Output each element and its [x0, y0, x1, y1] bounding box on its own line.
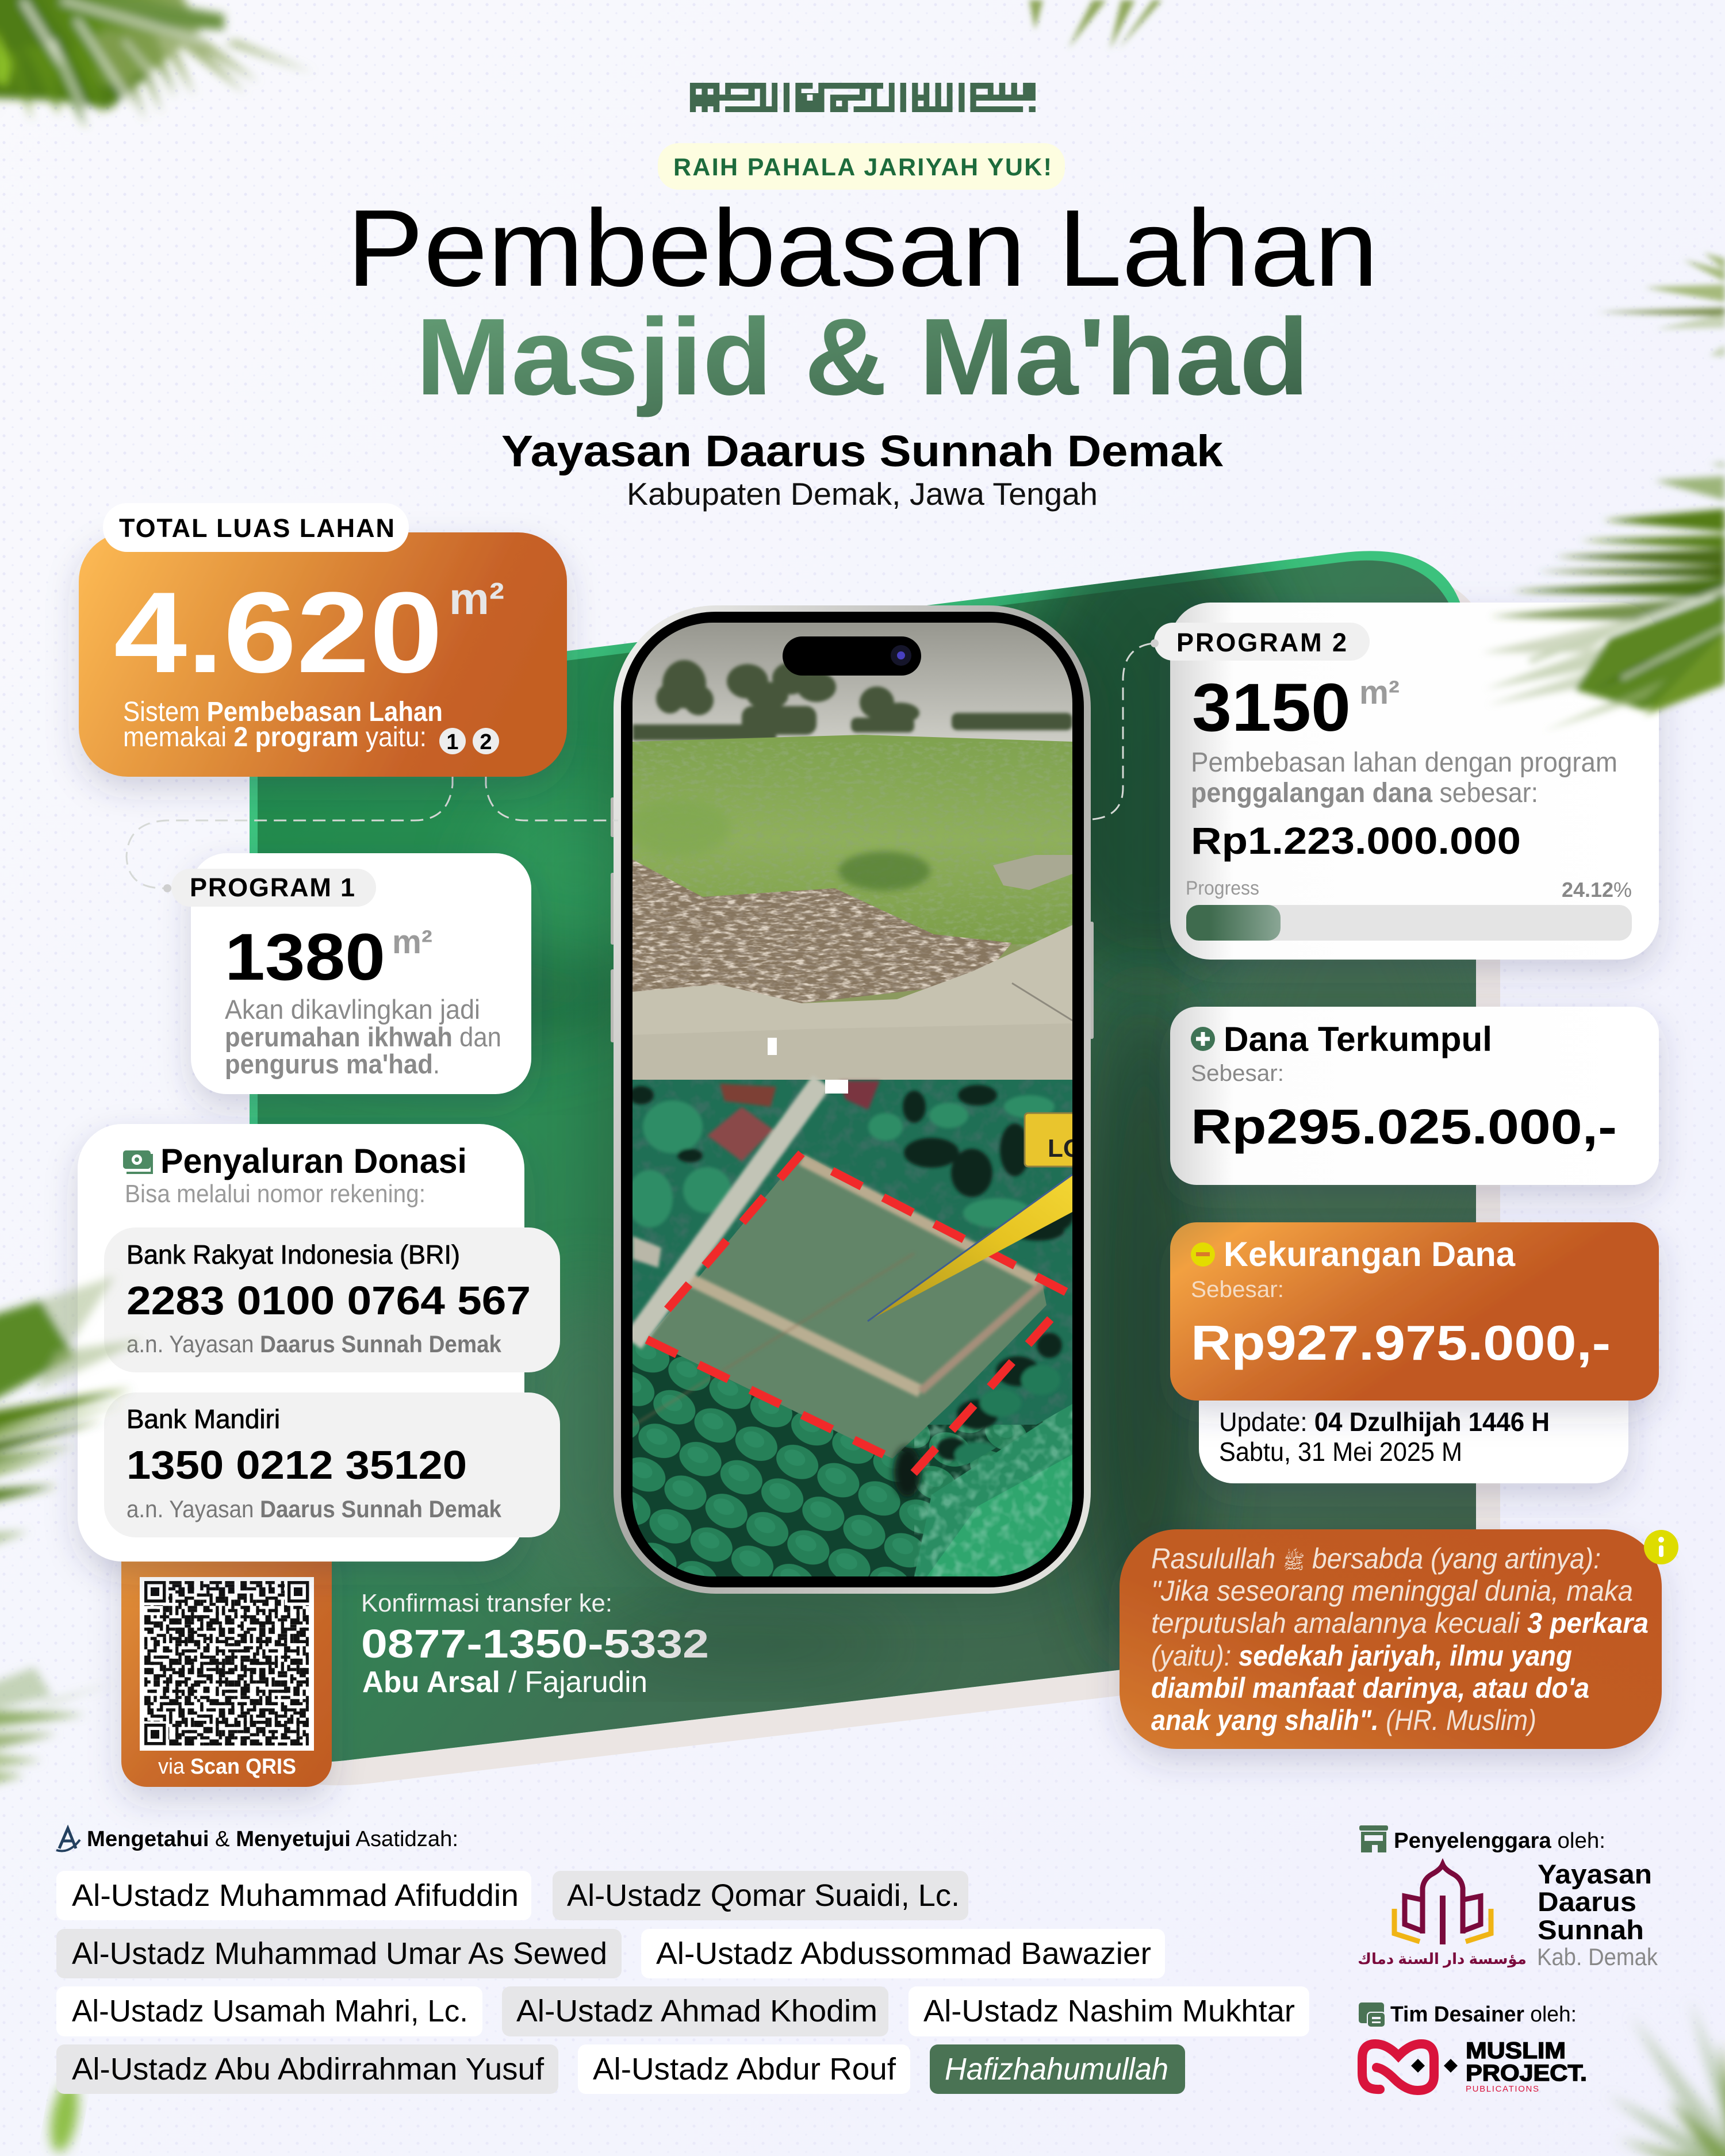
chip	[578, 2044, 910, 2094]
logo: muslim project: PROJECT.	[1466, 2061, 1587, 2086]
description: Sistem Pembebasan Lahan	[123, 697, 443, 727]
logo: muslim project: MUSLIM	[1466, 2038, 1566, 2063]
chip	[930, 2044, 1185, 2094]
chip: Al-Ustadz Nashim Mukhtar	[923, 1994, 1295, 2028]
foundation name: Kab. Demak	[1537, 1943, 1658, 1970]
palm: top center	[1029, 0, 1162, 49]
label pill: TOTAL LUAS LAHAN	[119, 513, 394, 543]
chip: Al-Ustadz Muhammad Afifuddin	[72, 1878, 519, 1913]
total value: m²	[449, 573, 504, 624]
area value: m²	[392, 923, 432, 961]
hadith callout: terputuslah amalannya kecuali 3 perkara	[1151, 1607, 1649, 1639]
description: Pembebasan lahan dengan program	[1191, 747, 1617, 778]
progress bar: 24.12%	[1562, 878, 1632, 901]
hadith callout: anak yang shalih". (HR. Muslim)	[1151, 1704, 1536, 1736]
palm: top left	[0, 0, 314, 128]
dashed connector lines	[126, 643, 1153, 888]
chip	[641, 1929, 1165, 1978]
description: memakai 2 program yaitu:	[123, 722, 427, 753]
icon: plus	[1191, 1027, 1215, 1051]
area value: 3150	[1192, 670, 1351, 746]
chip	[502, 1986, 888, 2036]
logo: muslim project: PUBLICATIONS	[1466, 2084, 1539, 2094]
red land boundary	[647, 1153, 1066, 1473]
photo: field view	[627, 623, 1072, 1081]
card: dana terkumpul	[1170, 1007, 1659, 1185]
progress bar	[1186, 877, 1632, 941]
hadith callout	[1120, 1529, 1678, 1749]
subtitle: Kabupaten Demak, Jawa Tengah	[627, 476, 1098, 512]
bank: BRI: Bank Rakyat Indonesia (BRI)	[126, 1240, 460, 1269]
progress bar: Progress	[1186, 877, 1259, 899]
card: penyaluran donasi	[78, 1124, 560, 1562]
location pin	[868, 1113, 1094, 1321]
label pill	[1151, 623, 1370, 661]
tagline pill: RAIH PAHALA JARIYAH YUK!	[673, 154, 1052, 181]
chip: Al-Ustadz Ahmad Khodim	[516, 1994, 877, 2028]
hadith callout: Rasulullah ﷺ bersabda (yang artinya):	[1151, 1543, 1601, 1575]
transfer confirmation: 0877-1350-5332	[361, 1621, 709, 1666]
card: program 2	[1151, 603, 1659, 960]
chip	[553, 1871, 968, 1920]
bank: BRI	[104, 1227, 560, 1372]
logo: muslim project	[1362, 2038, 1587, 2094]
bank: Mandiri: Bank Mandiri	[126, 1404, 280, 1434]
card: update date	[1199, 1368, 1628, 1483]
chip	[56, 1871, 531, 1920]
tagline pill	[658, 143, 1065, 190]
card: update date: Sabtu, 31 Mei 2025 M	[1219, 1437, 1462, 1467]
card: kekurangan dana: Rp927.975.000,-	[1191, 1316, 1611, 1371]
palm: bottom left spot	[46, 2080, 83, 2154]
card: program 1	[163, 853, 531, 1094]
organizer block	[1358, 1825, 1658, 1970]
palm: right upper	[1597, 253, 1725, 356]
phone	[611, 605, 1094, 1594]
card: kekurangan dana: Sebesar:	[1191, 1277, 1284, 1302]
chip: Al-Ustadz Abu Abdirrahman Yusuf	[72, 2052, 545, 2086]
chip	[56, 1929, 622, 1978]
photo: aerial view	[627, 1080, 1094, 1576]
organizer block: Penyelenggara oleh:	[1394, 1829, 1605, 1853]
transfer confirmation: Konfirmasi transfer ke:	[361, 1589, 612, 1617]
chip: Al-Ustadz Muhammad Umar As Sewed	[72, 1936, 607, 1971]
foundation name: Sunnah	[1538, 1915, 1644, 1945]
area value: 1380	[225, 920, 385, 994]
description: penggalangan dana sebesar:	[1191, 778, 1538, 808]
palm: bottom right	[1607, 2000, 1725, 2156]
chip: Hafizhahumullah	[945, 2052, 1168, 2086]
bank: Mandiri	[104, 1392, 560, 1537]
arabic name: مؤسسة دار السنة دماك	[1358, 1950, 1527, 1968]
description	[225, 994, 501, 1079]
subtitle: Yayasan Daarus Sunnah Demak	[501, 427, 1223, 476]
card: dana terkumpul: Dana Terkumpul	[1224, 1020, 1492, 1058]
transfer confirmation: Abu Arsal / Fajarudin	[362, 1666, 647, 1699]
title: Masjid & Ma'had	[416, 296, 1309, 418]
title: Pembebasan Lahan	[347, 187, 1378, 309]
description	[123, 697, 443, 753]
location pin: LO	[1048, 1134, 1083, 1163]
card: dana terkumpul: Sebesar:	[1191, 1061, 1284, 1086]
description: perumahan ikhwah dan	[225, 1022, 501, 1052]
chip: Al-Ustadz Abdur Rouf	[593, 2052, 896, 2086]
bank: BRI: 2283 0100 0764 567	[126, 1278, 531, 1323]
chips: scholars	[56, 1871, 1309, 2094]
approval heading: Mengetahui & Menyetujui Asatidzah:	[87, 1827, 458, 1851]
bank: Mandiri: a.n. Yayasan Daarus Sunnah Demak	[126, 1495, 502, 1522]
label pill: PROGRAM 2	[1176, 628, 1347, 657]
palm: left lower	[0, 1667, 115, 1785]
foundation name	[1537, 1859, 1658, 1970]
foundation name: Yayasan	[1538, 1859, 1652, 1889]
icon: shop	[1359, 1825, 1388, 1852]
card: update date: Update: 04 Dzulhijah 1446 H	[1219, 1407, 1550, 1437]
QRIS card	[121, 1529, 332, 1787]
chip: Al-Ustadz Qomar Suaidi, Lc.	[567, 1878, 960, 1913]
bank: Mandiri: 1350 0212 35120	[126, 1443, 467, 1487]
palm: right large	[1482, 463, 1725, 731]
icon: minus	[1191, 1242, 1215, 1267]
icon: money	[123, 1150, 152, 1173]
description: pengurus ma'had.	[225, 1049, 440, 1079]
description: Akan dikavlingkan jadi	[225, 994, 480, 1025]
phone side buttons	[611, 797, 1094, 1042]
chip	[56, 1986, 482, 2036]
heading: Penyaluran Donasi	[160, 1142, 467, 1180]
logo: foundation mark	[1394, 1865, 1491, 1944]
designer block	[1359, 2002, 1587, 2094]
label pill	[163, 869, 376, 907]
heading	[125, 1142, 467, 1208]
chip	[908, 1986, 1309, 2036]
hadith callout: (yaitu): sedekah jariyah, ilmu yang	[1151, 1640, 1572, 1672]
chip	[56, 2044, 558, 2094]
label pill: PROGRAM 1	[190, 873, 355, 902]
foundation name: Daarus	[1538, 1886, 1636, 1917]
palm: left middle	[0, 1276, 144, 1547]
card: kekurangan dana	[1170, 1222, 1659, 1401]
description	[1191, 747, 1617, 808]
label pill	[103, 503, 409, 552]
area value: m²	[1359, 674, 1400, 711]
heading: Bisa melalui nomor rekening:	[125, 1180, 425, 1208]
green backdrop panel	[250, 517, 1500, 1785]
card: kekurangan dana: Kekurangan Dana	[1224, 1235, 1516, 1273]
bank: BRI: a.n. Yayasan Daarus Sunnah Demak	[126, 1330, 502, 1357]
hadith callout: diambil manfaat darinya, atau do'a	[1151, 1672, 1589, 1704]
chip: Al-Ustadz Usamah Mahri, Lc.	[72, 1994, 468, 2028]
transfer confirmation	[361, 1589, 709, 1699]
aerial canopy	[627, 1080, 1075, 1467]
QRIS card: via Scan QRIS	[158, 1755, 296, 1779]
QR code	[143, 1579, 310, 1747]
total value: 4.620	[114, 569, 443, 697]
title	[347, 187, 1378, 418]
debris of cut timber	[632, 857, 1023, 1006]
subtitle	[501, 427, 1223, 512]
icon: info	[1644, 1530, 1678, 1564]
bismillah calligraphy	[690, 83, 1036, 112]
icon: signature	[56, 1828, 80, 1851]
hadith callout: "Jika seseorang meninggal dunia, maka	[1151, 1575, 1633, 1607]
number badges: 1	[446, 730, 459, 754]
number badges	[439, 728, 499, 754]
chip: Al-Ustadz Abdussommad Bawazier	[656, 1936, 1151, 1971]
card: dana terkumpul: Rp295.025.000,-	[1191, 1100, 1617, 1154]
target amount: Rp1.223.000.000	[1191, 819, 1521, 862]
card: total luas lahan	[79, 503, 567, 777]
designer block: Tim Desainer oleh:	[1390, 2002, 1577, 2027]
icon: monitor	[1359, 2002, 1385, 2027]
number badges: 2	[480, 730, 492, 754]
